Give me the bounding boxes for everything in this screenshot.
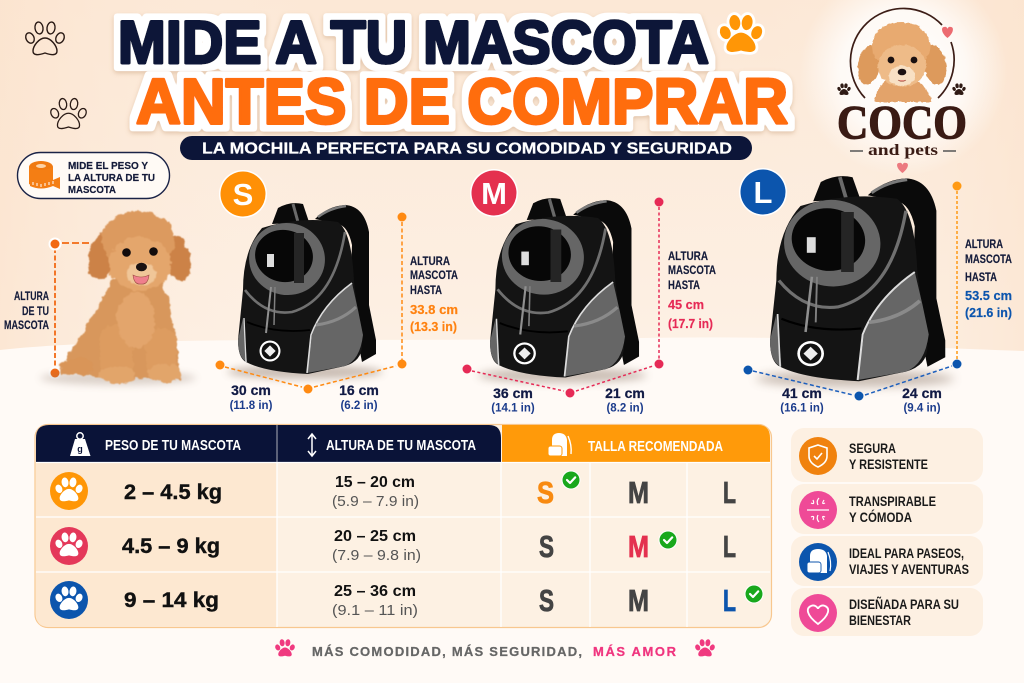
row 1: L <box>723 475 736 510</box>
row 2 <box>50 527 736 565</box>
label: S height: ALTURA <box>410 254 450 268</box>
title line 2: ANTES DE COMPRAR <box>136 66 788 138</box>
label: L height: MASCOTA <box>965 252 1012 266</box>
feature: segura: SEGURA <box>849 441 896 456</box>
feature: bienestar <box>791 588 983 636</box>
subtitle pill <box>180 136 752 160</box>
row 2: 20 – 25 cm <box>334 528 416 545</box>
label: M height: MASCOTA <box>668 263 716 277</box>
label: M height: 45 cm <box>668 297 704 312</box>
row 2: M <box>628 529 649 564</box>
row 1: (5.9 – 7.9 in) <box>332 493 419 510</box>
icon: weight <box>70 433 90 456</box>
badge: S: S <box>233 177 253 212</box>
measure lines M <box>462 198 664 398</box>
label: M height <box>668 249 716 331</box>
label: S dims: 30 cm <box>231 382 271 398</box>
title line 1: MIDE A TU MASCOTA <box>118 9 709 76</box>
label: S height: (13.3 in) <box>410 319 457 334</box>
row 1: S <box>537 475 554 510</box>
label: M height: ALTURA <box>668 249 708 263</box>
label: M height: (17.7 in) <box>668 316 713 331</box>
label: S height: HASTA <box>410 283 442 297</box>
label: L height: HASTA <box>965 270 997 284</box>
feature: transpirable: TRANSPIRABLE <box>849 494 936 509</box>
badge: S <box>219 170 267 218</box>
measure lines S <box>216 212 406 394</box>
measure lines L <box>744 182 962 400</box>
label: M dims: (14.1 in) <box>491 402 535 414</box>
row 1: 2 – 4.5 kg <box>124 481 222 504</box>
callout text: MIDE EL PESO Y <box>68 160 148 172</box>
row 2: 4.5 – 9 kg <box>122 535 220 558</box>
feature: segura <box>791 428 983 482</box>
row 1 <box>50 470 736 510</box>
label: L dims <box>780 385 942 414</box>
feature: transpirable <box>791 484 983 534</box>
footer slogan: MÁS AMOR <box>593 644 677 659</box>
label: S height <box>410 254 458 334</box>
label: L height: 53.5 cm <box>965 288 1012 303</box>
icon: orange paw <box>718 14 764 52</box>
badge: L: L <box>754 175 772 210</box>
feature: bienestar: BIENESTAR <box>849 613 911 628</box>
label: dog height: DE TU <box>22 304 49 318</box>
label: M dims: 36 cm <box>493 385 533 401</box>
row 3 <box>50 581 764 619</box>
label: dog height: ALTURA <box>14 289 49 303</box>
label: M dims: (8.2 in) <box>606 402 644 414</box>
feature: transpirable: Y CÓMODA <box>849 510 912 525</box>
table header: recommended: TALLA RECOMENDADA <box>588 439 723 455</box>
table header: dark: PESO DE TU MASCOTA <box>105 438 241 454</box>
label: L height: (21.6 in) <box>965 305 1012 320</box>
table header: recommended <box>502 425 770 462</box>
feature: paseos: VIAJES Y AVENTURAS <box>849 562 969 577</box>
label: L dims: (16.1 in) <box>780 402 824 414</box>
logo wordmark: COCO <box>837 96 967 150</box>
icon: backpack <box>548 433 571 456</box>
label: S height: MASCOTA <box>410 268 458 282</box>
label: L dims: 41 cm <box>782 385 822 401</box>
callout text: LA ALTURA DE TU <box>68 172 155 184</box>
row 3: S <box>539 583 554 618</box>
label: S dims: 16 cm <box>339 382 379 398</box>
label: L height: ALTURA <box>965 237 1003 251</box>
row 1: M <box>628 475 649 510</box>
row 3: 25 – 36 cm <box>334 583 416 600</box>
label: S dims <box>230 382 379 412</box>
subtitle pill: LA MOCHILA PERFECTA PARA SU COMODIDAD Y SEGURIDAD <box>202 140 732 158</box>
row 3: 9 – 14 kg <box>124 589 219 612</box>
callout text: MASCOTA <box>68 184 116 196</box>
icon: outline paw small <box>49 98 88 129</box>
icon: outline paw <box>24 22 66 55</box>
feature: bienestar: DISEÑADA PARA SU <box>849 597 959 612</box>
backpack M <box>478 198 647 383</box>
callout text <box>68 160 155 196</box>
logo ring <box>850 8 954 98</box>
feature: paseos: IDEAL PARA PASEOS, <box>849 546 964 561</box>
badge: L <box>739 168 787 216</box>
logo heart <box>942 27 953 38</box>
label: M dims: 21 cm <box>605 385 645 401</box>
icon: height arrows <box>308 434 316 456</box>
dog height guide <box>48 238 90 380</box>
row 3: (9.1 – 11 in) <box>332 602 418 619</box>
feature: paseos <box>791 536 983 586</box>
row 3: L <box>723 583 736 618</box>
row 2: (7.9 – 9.8 in) <box>332 547 421 564</box>
callout: measure <box>18 152 170 198</box>
row 1: 15 – 20 cm <box>335 474 415 491</box>
logo <box>799 0 1007 176</box>
label: L dims: (9.4 in) <box>903 402 941 414</box>
footer slogan: MÁS COMODIDAD, MÁS SEGURIDAD, <box>312 644 582 659</box>
table header: dark <box>36 425 501 462</box>
dog photo <box>40 211 196 385</box>
label: S dims: (6.2 in) <box>340 400 378 412</box>
label: L dims: 24 cm <box>902 385 942 401</box>
icon: weight: g <box>77 444 83 454</box>
badge: M <box>470 169 518 217</box>
row 2: S <box>539 529 554 564</box>
label: dog height: MASCOTA <box>4 318 49 332</box>
badge: M: M <box>481 176 507 211</box>
label: M dims <box>491 385 645 414</box>
row 3: M <box>628 583 649 618</box>
footer slogan <box>274 639 716 659</box>
label: L height <box>965 237 1012 320</box>
icon: tape measure <box>29 161 60 189</box>
backpack L <box>756 176 954 387</box>
logo tagline: and pets <box>868 142 938 159</box>
feature: segura: Y RESISTENTE <box>849 457 928 472</box>
table header: dark: ALTURA DE TU MASCOTA <box>326 438 476 454</box>
label: M height: HASTA <box>668 278 700 292</box>
label: dog height <box>4 289 49 332</box>
label: S height: 33.8 cm <box>410 302 458 317</box>
row 2: L <box>723 529 736 564</box>
label: S dims: (11.8 in) <box>230 400 273 412</box>
backpack S <box>227 203 383 379</box>
logo puppy <box>855 22 949 102</box>
size table <box>35 424 772 628</box>
